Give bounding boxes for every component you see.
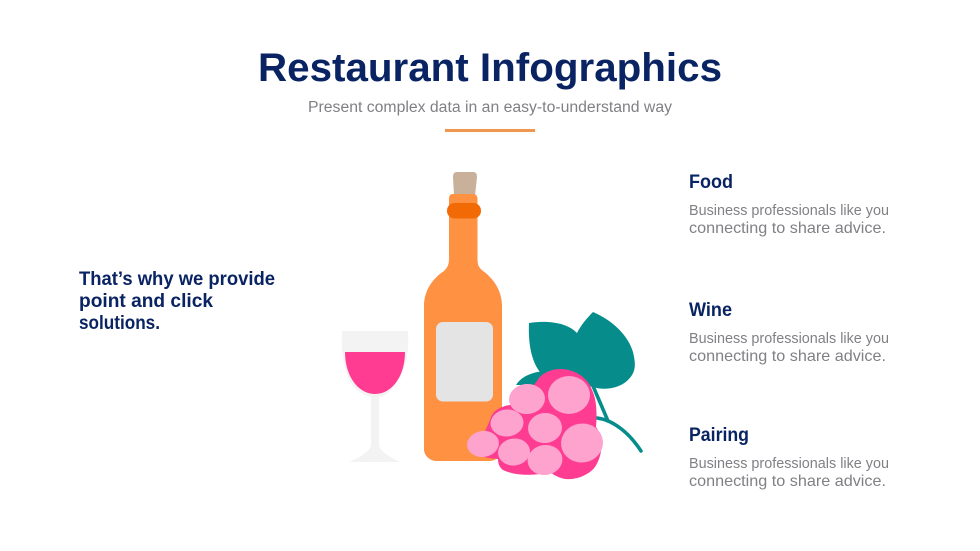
left statement text: point and click [79,291,213,312]
title underline [445,129,535,132]
bottle body [424,194,502,461]
title: Restaurant Infographics [258,46,722,90]
grape [496,436,532,468]
grape [527,412,563,444]
leaves [529,312,635,389]
left statement text [79,269,275,334]
item: Food: Food [689,172,733,193]
grape [508,382,546,416]
item: Food [689,172,889,237]
item: Wine [689,300,889,365]
leaf: lower [516,371,555,385]
grape [465,429,501,459]
wine [345,352,405,394]
bottle neck band [447,203,481,218]
item: Pairing: connecting to share advice. [689,473,886,490]
cork [453,172,477,196]
left statement text: That’s why we provide [79,269,275,290]
vine stem [593,386,641,451]
item: Pairing: Pairing [689,425,749,446]
item: Food: connecting to share advice. [689,220,886,237]
grape [526,443,564,477]
grape [558,421,606,465]
grape [548,376,590,414]
item: Pairing: Business professionals like you [689,455,889,472]
icon: grapes [465,312,641,479]
icon: wine glass [342,331,408,462]
item: Wine: Wine [689,300,732,321]
icon: wine bottle [424,172,502,461]
subtitle: Present complex data in an easy-to-understand way [308,99,672,116]
bottle label [436,322,493,402]
item: Wine: connecting to share advice. [689,348,886,365]
left statement text: solutions. [79,313,160,334]
item: Pairing [689,425,889,490]
grape bunch [476,369,602,479]
grape [489,408,525,438]
item: Food: Business professionals like you [689,202,889,219]
item: Wine: Business professionals like you [689,330,889,347]
